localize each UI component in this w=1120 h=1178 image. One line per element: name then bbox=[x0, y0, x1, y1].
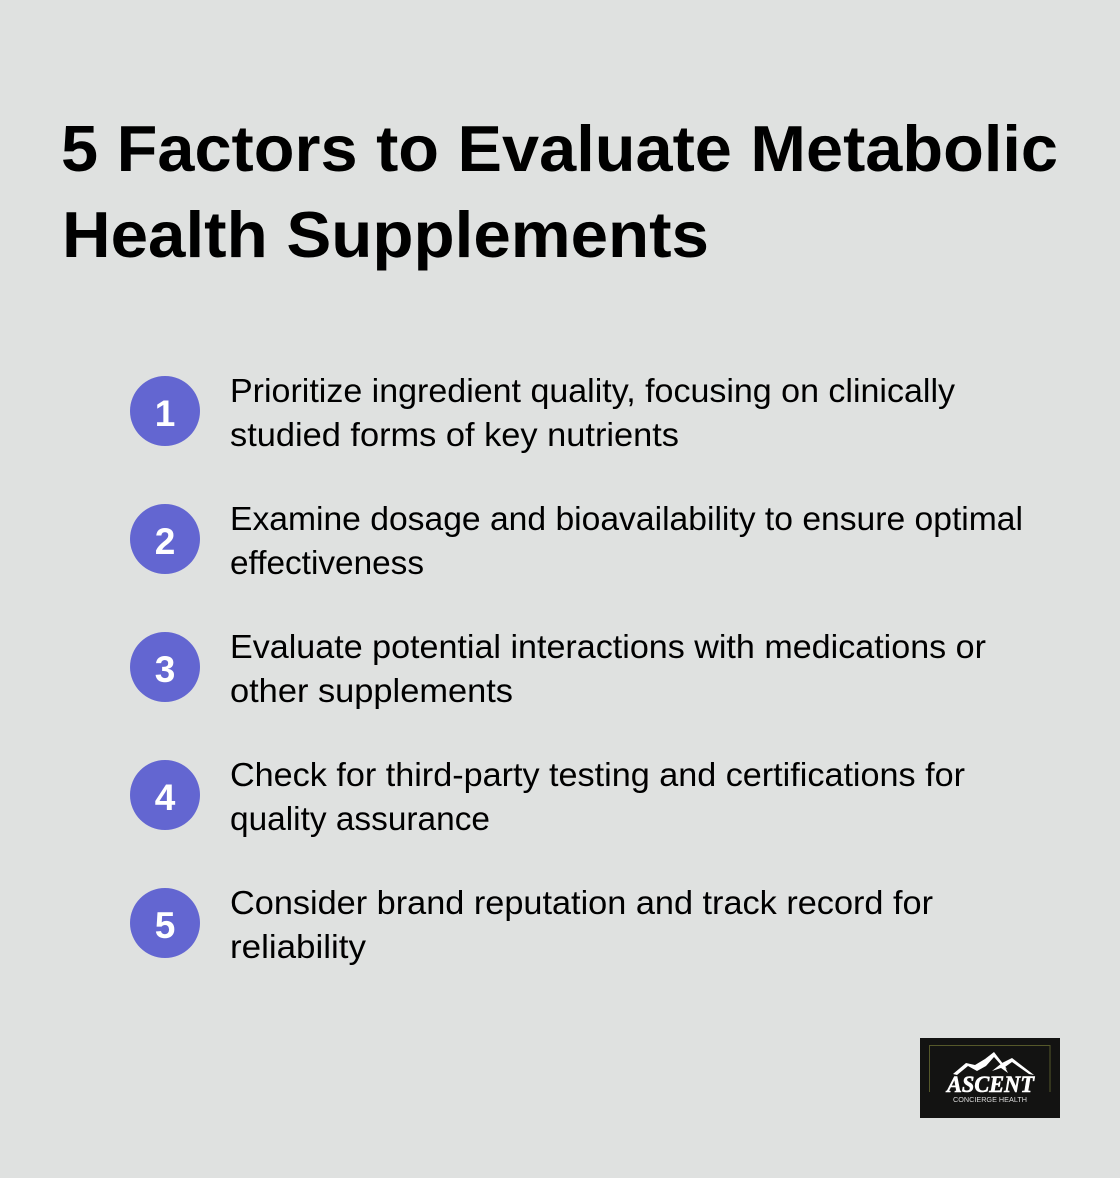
number badge 5 bbox=[130, 888, 200, 958]
number badge 4: 4 bbox=[155, 777, 176, 818]
factor 4 text: quality assurance bbox=[230, 800, 490, 837]
factor 5 text: reliability bbox=[230, 928, 367, 965]
title: Health Supplements bbox=[62, 198, 709, 271]
title bbox=[61, 112, 1058, 271]
factor 1 text bbox=[230, 372, 956, 453]
factor 3 bbox=[130, 628, 986, 709]
number badge 2 bbox=[130, 504, 200, 574]
factor 4 text: Check for third-party testing and certifications for bbox=[230, 756, 965, 793]
number badge 1: 1 bbox=[155, 393, 175, 434]
factor 1 text: Prioritize ingredient quality, focusing on clinically bbox=[230, 372, 956, 409]
factor 3 text: Evaluate potential interactions with medications or bbox=[230, 628, 986, 665]
list of factors bbox=[130, 372, 1023, 965]
factor 5 text: Consider brand reputation and track record for bbox=[230, 884, 933, 921]
logo: Ascent Concierge Health bbox=[920, 1038, 1060, 1118]
number badge 2: 2 bbox=[155, 521, 175, 562]
factor 4 bbox=[130, 756, 965, 837]
number badge 3 bbox=[130, 632, 200, 702]
logo wordmark: ASCENT bbox=[945, 1072, 1035, 1097]
logo tagline: CONCIERGE HEALTH bbox=[953, 1097, 1027, 1104]
factor 2 text: effectiveness bbox=[230, 544, 424, 581]
number badge 5: 5 bbox=[155, 905, 175, 946]
number badge 3: 3 bbox=[155, 649, 175, 690]
factor 5 bbox=[130, 884, 933, 965]
factor 2 bbox=[130, 500, 1023, 581]
factor 5 text bbox=[230, 884, 933, 965]
number badge 1 bbox=[130, 376, 200, 446]
factor 2 text: Examine dosage and bioavailability to ensure optimal bbox=[230, 500, 1023, 537]
number badge 4 bbox=[130, 760, 200, 830]
title: 5 Factors to Evaluate Metabolic bbox=[61, 112, 1058, 185]
factor 1 text: studied forms of key nutrients bbox=[230, 416, 679, 453]
factor 1 bbox=[130, 372, 956, 453]
icon: mountains bbox=[953, 1052, 1034, 1075]
factor 2 text bbox=[230, 500, 1023, 581]
factor 4 text bbox=[230, 756, 965, 837]
factor 3 text bbox=[230, 628, 986, 709]
factor 3 text: other supplements bbox=[230, 672, 513, 709]
